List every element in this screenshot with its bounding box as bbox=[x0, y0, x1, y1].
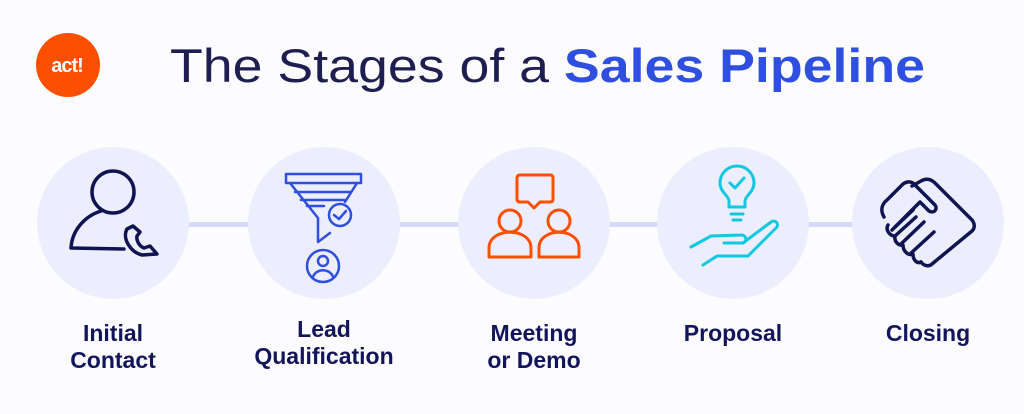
icon: hand with lightbulb bbox=[691, 166, 777, 265]
label: Initial bbox=[83, 320, 143, 346]
stage 2: Lead Qualification: Qualification bbox=[254, 343, 394, 369]
stage 2: Lead Qualification bbox=[248, 147, 400, 369]
label: Lead bbox=[297, 316, 351, 342]
stage 5: Closing bbox=[852, 147, 1004, 346]
stage 1: Initial Contact bbox=[37, 147, 189, 373]
icon: funnel bbox=[286, 174, 361, 282]
label: Closing bbox=[886, 320, 970, 346]
connector line bbox=[113, 222, 928, 227]
stage 3: Meeting or Demo: or Demo bbox=[487, 347, 581, 373]
logo: act!: act! bbox=[51, 55, 83, 77]
stage 3: Meeting or Demo bbox=[458, 147, 610, 373]
icon: two people with speech bubble bbox=[489, 175, 579, 257]
logo: act! bbox=[36, 33, 100, 97]
title: The Stages of a Sales Pipeline bbox=[170, 39, 925, 92]
icon: person with phone bbox=[71, 171, 157, 255]
label: Meeting bbox=[491, 320, 577, 346]
stage 4: Proposal bbox=[657, 147, 809, 346]
stage 1: Initial Contact: Contact bbox=[70, 347, 156, 373]
icon: handshake bbox=[882, 179, 974, 266]
label: Proposal bbox=[684, 320, 782, 346]
